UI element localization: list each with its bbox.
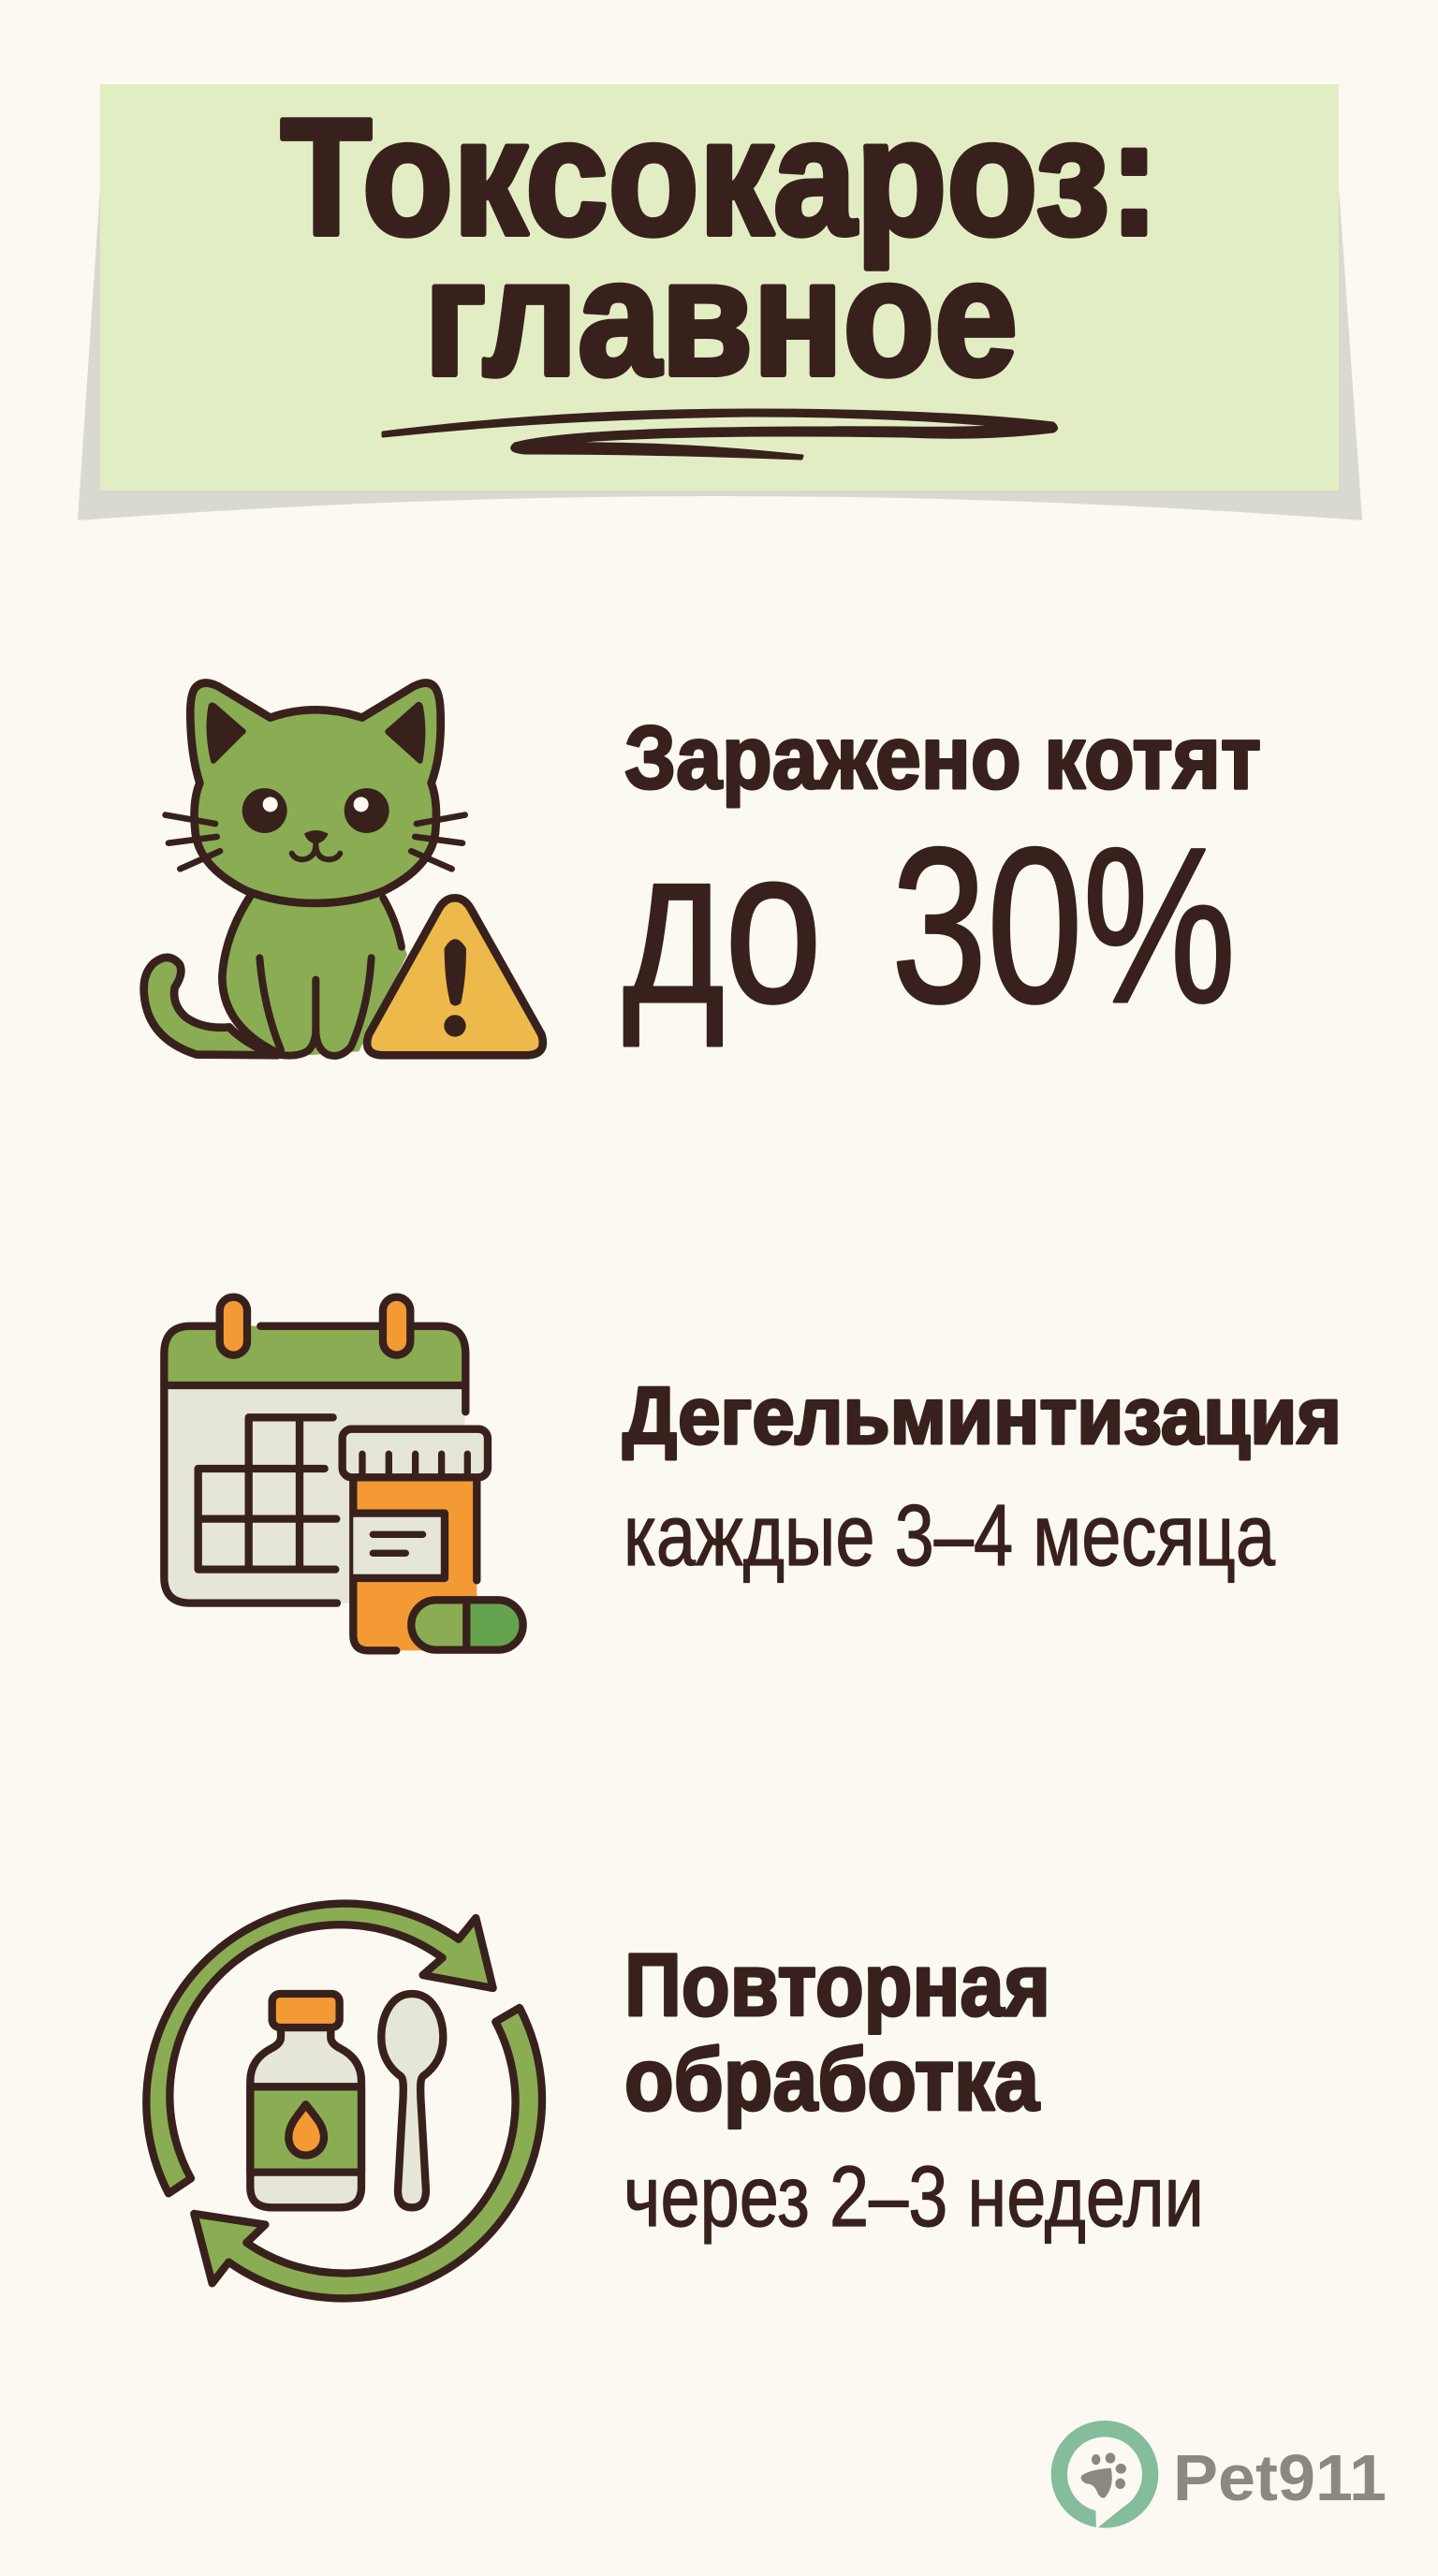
text: infected kittens: до bbox=[623, 802, 822, 1049]
text: infected kittens bbox=[623, 708, 1261, 1049]
title bbox=[281, 84, 1159, 410]
kitten ears bbox=[206, 702, 425, 764]
kitten tail bbox=[144, 958, 278, 1055]
text: deworming schedule: каждые 3–4 месяца bbox=[624, 1486, 1275, 1584]
icon: kitten with warning sign bbox=[144, 683, 543, 1056]
title underline scribble bbox=[383, 410, 1056, 459]
kitten nose and mouth bbox=[292, 830, 340, 859]
text: repeat treatment: Повторная bbox=[624, 1936, 1050, 2035]
spoon bbox=[381, 1994, 443, 2207]
text: infected kittens: Заражено котят bbox=[624, 708, 1261, 808]
capsule pill bbox=[411, 1600, 523, 1650]
calendar bbox=[164, 1297, 465, 1603]
icon: calendar with pill bottle bbox=[164, 1297, 523, 1650]
panel: title banner bbox=[78, 84, 1362, 520]
banner sheet bbox=[100, 84, 1339, 490]
cycle arrow top bbox=[146, 1904, 493, 2193]
logo wordmark: Pet911 bbox=[1173, 2441, 1387, 2514]
text: repeat treatment: обработка bbox=[624, 2030, 1040, 2130]
text: repeat treatment bbox=[624, 1936, 1204, 2245]
kitten whiskers bbox=[166, 815, 465, 869]
title: Токсокароз: bbox=[281, 84, 1159, 270]
icon: repeat cycle with medicine and spoon bbox=[146, 1904, 542, 2298]
cycle arrow bottom bbox=[194, 2008, 542, 2298]
kitten eyes bbox=[242, 788, 389, 833]
kitten body bbox=[222, 897, 407, 1056]
medicine bottle bbox=[250, 1994, 361, 2207]
kitten head bbox=[190, 683, 441, 903]
title: главное bbox=[424, 225, 1018, 410]
text: deworming schedule bbox=[623, 1371, 1342, 1584]
text: infected kittens: 30% bbox=[891, 802, 1236, 1049]
warning triangle bbox=[367, 898, 543, 1055]
banner shadow bbox=[78, 187, 1362, 520]
text: repeat treatment: через 2–3 недели bbox=[624, 2149, 1204, 2245]
text: deworming schedule: Дегельминтизация bbox=[623, 1371, 1342, 1461]
logo: Pet911 bbox=[1059, 2429, 1387, 2529]
logo icon: paw in speech bubble bbox=[1059, 2429, 1151, 2529]
pill bottle bbox=[343, 1429, 488, 1650]
